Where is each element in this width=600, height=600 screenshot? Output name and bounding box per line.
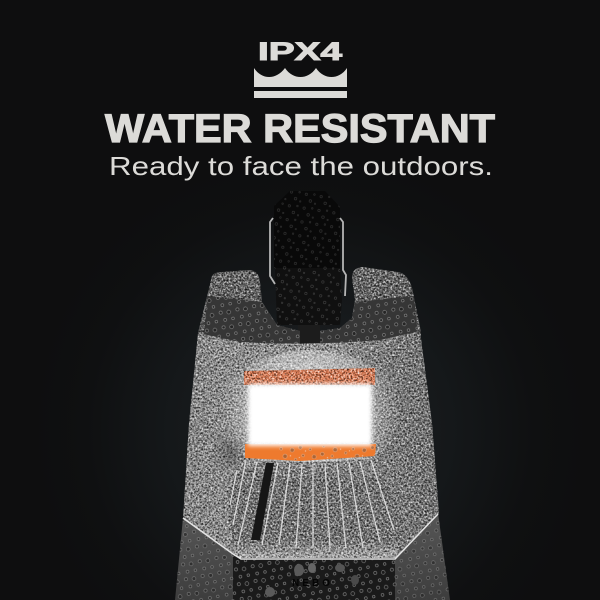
- icon: IPX4 water rating: [254, 38, 347, 98]
- title: WATER RESISTANT: [105, 107, 495, 151]
- lower left side panel: [175, 518, 233, 600]
- lower right side panel: [395, 513, 450, 600]
- upper orange band: [244, 368, 375, 385]
- icon: wave: [254, 68, 347, 87]
- IPX4 label: IPX4: [258, 38, 342, 66]
- lantern illustration: [175, 191, 450, 600]
- ribbed reflector: [183, 458, 438, 559]
- reflector ribs: [230, 460, 394, 548]
- lantern handle: [270, 191, 346, 345]
- right shoulder: [320, 267, 421, 344]
- glass chamfer edge: [183, 514, 438, 559]
- lamp glow: [218, 350, 402, 474]
- subtitle: Ready to face the outdoors.: [109, 151, 493, 181]
- NEBO logo: NEBO: [292, 578, 330, 589]
- dark slot: [251, 463, 274, 540]
- glass housing: [183, 331, 439, 558]
- wave base bar: [254, 91, 347, 98]
- lower center base: [233, 555, 395, 600]
- lit LED panel: [248, 384, 372, 446]
- lower orange band: [245, 444, 376, 461]
- left shoulder: [198, 270, 300, 344]
